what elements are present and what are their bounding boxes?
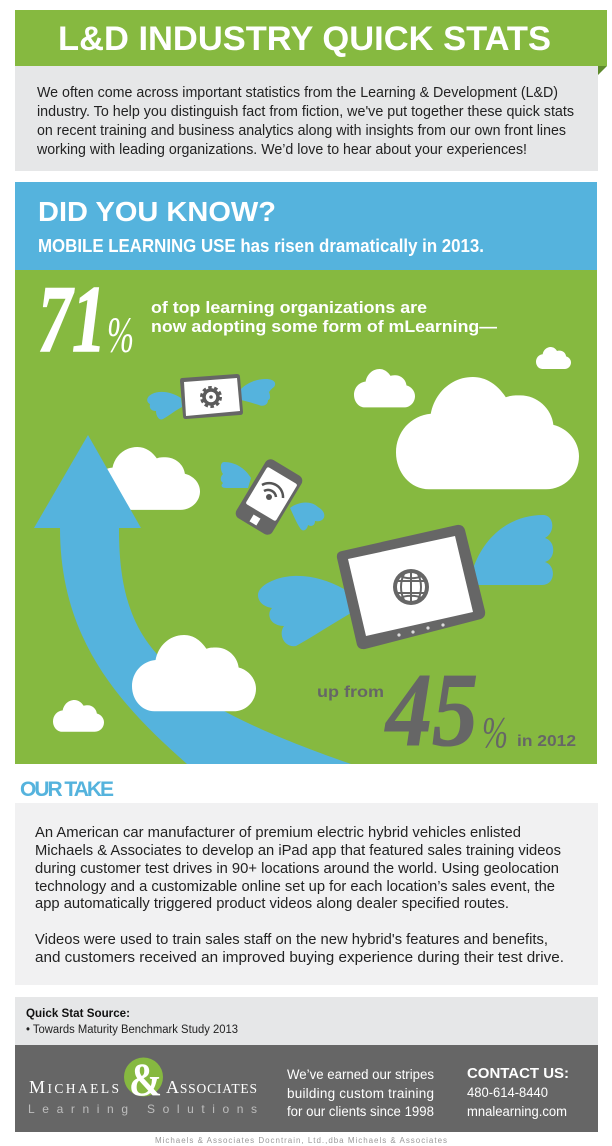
title banner — [15, 10, 607, 75]
panel: introduction: working with leading organizations. We’d love to hear about your experiences! — [36, 141, 527, 158]
text: adoption statement — [151, 298, 497, 336]
panel: our take text: and customers received an improved buying experience during their test drive. — [35, 949, 564, 966]
icon: large winged tablet with globe — [258, 515, 553, 649]
panel: quick stat source: Quick Stat Source: — [26, 1008, 130, 1020]
arrow: rising blue arrow — [34, 435, 351, 764]
logo: Michaels and Associates: Learning — [28, 1102, 128, 1116]
panel: our take text: Michaels & Associates to develop an iPad app that featured sales training videos — [35, 842, 561, 859]
panel: did you know header: DID YOU KNOW? — [38, 196, 276, 227]
title banner: L&D INDUSTRY QUICK STATS — [58, 20, 551, 58]
panel: introduction — [15, 66, 598, 171]
panel: introduction: industry. To help you distinguish fact from fiction, we've put together these quick stats — [37, 103, 574, 120]
text: tagline: building custom training — [287, 1086, 434, 1101]
stat: up from 45 percent in 2012: up from — [317, 684, 384, 701]
panel: our take text: app automatically triggered product videos along dealer specified routes. — [35, 895, 509, 912]
panel: our take text: during customer test drives in 90+ locations around the world. Using geolocation — [35, 860, 559, 877]
icon: winged phone with wifi — [221, 457, 324, 537]
logo: Michaels and Associates: & — [129, 1054, 162, 1106]
panel: quick stat source: • Towards Maturity Benchmark Study 2013 — [26, 1024, 238, 1036]
stat: 71 percent: 71 — [38, 266, 106, 372]
text: contact details: mnalearning.com — [467, 1104, 567, 1119]
text: legal footer: Michaels & Associates Docntrain, Ltd.,dba Michaels & Associates — [155, 1136, 447, 1145]
text: contact details — [467, 1066, 569, 1119]
text: tagline: We’ve earned our stripes — [287, 1067, 434, 1082]
panel: introduction: on recent training and business analytics along with insights from our own front lines — [37, 122, 566, 139]
stat: 71 percent: % — [107, 308, 134, 364]
panel: did you know header: MOBILE LEARNING USE has risen dramatically in 2013. — [38, 236, 484, 256]
panel: mobile learning illustration — [15, 266, 597, 768]
cloud: small top right — [536, 347, 571, 369]
icon: small winged tablet with gear — [147, 374, 275, 419]
logo: Michaels and Associates: MICHAELS — [29, 1077, 119, 1097]
panel: our take text: An American car manufacturer of premium electric hybrid vehicles enlisted — [35, 824, 521, 841]
panel: our take text — [15, 803, 598, 985]
cloud: large right — [396, 377, 579, 489]
stat: up from 45 percent in 2012: % — [482, 708, 508, 757]
stat: up from 45 percent in 2012 — [317, 651, 576, 768]
panel: introduction: We often come across important statistics from the Learning & Development (L&D) — [37, 84, 558, 101]
text: adoption statement: of top learning organizations are — [151, 298, 427, 317]
cloud: medium top — [354, 369, 415, 407]
cloud: bottom center — [132, 635, 256, 711]
logo: Michaels and Associates: Solutions — [147, 1102, 257, 1116]
stat: up from 45 percent in 2012: 45 — [384, 651, 478, 768]
text: tagline: for our clients since 1998 — [287, 1104, 434, 1119]
text: adoption statement: now adopting some form of mLearning— — [151, 317, 497, 336]
stat: up from 45 percent in 2012: in 2012 — [517, 733, 576, 750]
panel: did you know header — [15, 182, 597, 270]
logo: Michaels and Associates: ASSOCIATES — [166, 1077, 257, 1097]
text: tagline — [287, 1067, 434, 1119]
text: contact details: 480-614-8440 — [467, 1085, 548, 1100]
cloud: small bottom left — [53, 700, 104, 732]
panel: our take text: technology and a customizable online set up for each location’s sales event, the — [35, 878, 555, 895]
text: contact details: CONTACT US: — [467, 1066, 569, 1082]
cloud: behind arrow — [92, 447, 200, 510]
panel: our take text: Videos were used to train sales staff on the new hybrid's features and benefits, — [35, 931, 548, 948]
panel: quick stat source — [15, 997, 598, 1045]
panel: footer bar — [15, 1045, 598, 1132]
logo: Michaels and Associates — [28, 1054, 257, 1116]
heading: our take: OUR TAKE — [20, 778, 114, 801]
